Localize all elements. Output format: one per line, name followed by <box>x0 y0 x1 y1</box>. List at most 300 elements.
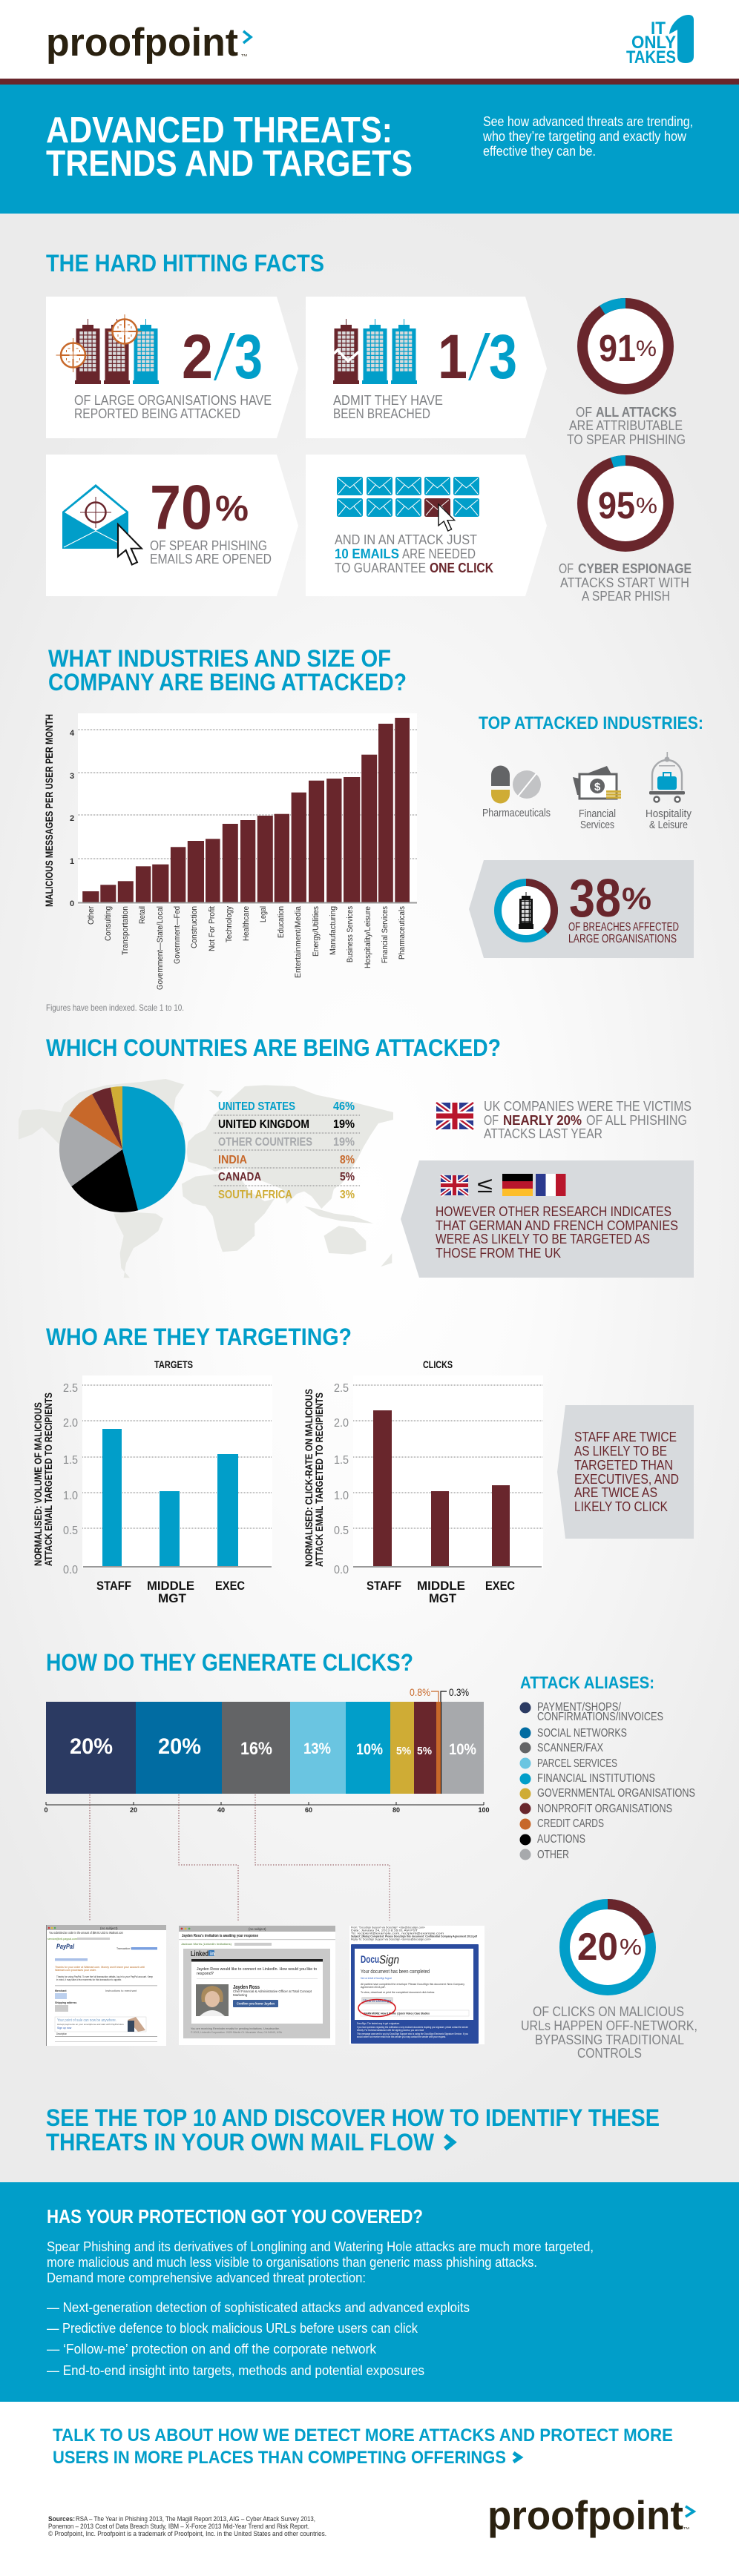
list: — Predictive defence to block malicious URLs before users can click <box>47 2321 418 2336</box>
axis title <box>33 1393 54 1566</box>
icon: chevron <box>445 2136 453 2149</box>
axis values: 0.5 <box>63 1525 78 1537</box>
category labels: Transportation <box>121 906 130 955</box>
screenshot: DocuSign email: Docu <box>361 1953 379 1965</box>
text: 95% caption: CYBER ESPIONAGE <box>578 561 692 576</box>
icon: email grid <box>337 477 479 531</box>
screenshot: PayPal email: Shipping address <box>55 2001 76 2004</box>
bar chart: malicious messages per industry <box>44 713 418 990</box>
logo: proofpoint footer: proofpoint <box>487 2492 683 2538</box>
callout: staff twice as likely: AS LIKELY TO BE <box>574 1444 667 1459</box>
screenshot: DocuSign email: View in DocuSign <box>364 1999 391 2004</box>
text: 95% caption: A SPEAR PHISH <box>582 589 670 604</box>
y axis values: 3 <box>70 772 74 781</box>
category labels: Healthcare <box>242 906 251 941</box>
heading: industries: COMPANY ARE BEING ATTACKED? <box>48 669 407 696</box>
category labels: Pharmaceuticals <box>398 906 407 960</box>
category labels: Legal <box>259 906 268 922</box>
title <box>46 110 413 184</box>
category labels: Government—State/Local <box>156 906 165 990</box>
category labels: Energy/Utilities <box>312 906 321 957</box>
legend: attack aliases: SOCIAL NETWORKS <box>537 1727 627 1740</box>
screenshot: DocuSign email: DocuSign. The fastest way to get a signature. <box>357 2022 400 2025</box>
legend: attack aliases: FINANCIAL INSTITUTIONS <box>537 1772 655 1785</box>
callout: staff twice as likely: LIKELY TO CLICK <box>574 1499 668 1514</box>
donut: 20%: 20 <box>577 1926 618 1969</box>
text: BEEN BREACHED <box>333 406 430 421</box>
panel: one third breached <box>306 297 547 438</box>
screenshot: DocuSign email: Your document has been completed <box>361 1969 430 1975</box>
axis values: 1.5 <box>63 1454 78 1467</box>
category labels <box>367 1579 515 1605</box>
footnote: index: Figures have been indexed. Scale 1 to 10. <box>46 1003 184 1013</box>
icon: financial services: Financial <box>579 808 616 820</box>
callout: German and French companies <box>401 1160 694 1278</box>
panel: 10 emails <box>306 455 547 596</box>
call to action: talk to us <box>53 2425 673 2468</box>
axis: 0 <box>44 1806 48 1814</box>
screenshot: PayPal email: Transaction ID: <box>116 1947 134 1950</box>
text: 20% caption: BYPASSING TRADITIONAL <box>535 2032 684 2047</box>
legend: country percentages: 8% <box>340 1154 355 1166</box>
screenshot: DocuSign email: This message was sent to you by DocuSign Support who is using the DocuSign Electronic Signature Service. If you <box>357 2032 468 2035</box>
y axis values: 0 <box>70 899 74 908</box>
screenshot: PayPal email: Instructions to merchant <box>105 1989 137 1992</box>
stat: 1/3: 1 <box>438 322 467 392</box>
screenshot: DocuSign email: Agreement 2013.pdf'. <box>361 1986 386 1989</box>
text <box>436 1204 678 1261</box>
callout: staff twice as likely: TARGETED THAN <box>574 1458 673 1473</box>
legend: attack aliases: SCANNER/FAX <box>537 1742 604 1754</box>
axis values: 2.0 <box>334 1417 349 1430</box>
callout: 38% of breaches <box>469 860 694 958</box>
stacked bar: click lures <box>44 1686 490 1814</box>
icon: UK flag <box>436 1103 473 1129</box>
intro text: who they’re targeting and exactly how <box>482 128 687 144</box>
axis title <box>303 1389 325 1567</box>
text: THAT GERMAN AND FRENCH COMPANIES <box>436 1218 678 1233</box>
stat: 70%: 70 <box>150 472 212 542</box>
donut: 95% <box>571 449 680 558</box>
category labels: Construction <box>190 906 199 948</box>
axis title: NORMALISED: VOLUME OF MALICIOUS <box>33 1402 44 1566</box>
stat: 2/3: 3 <box>234 322 263 392</box>
callout: red circle <box>358 1999 395 2017</box>
category labels <box>96 1579 245 1605</box>
bar chart: clicks: CLICKS <box>423 1358 453 1370</box>
small segment callouts: 0.3% <box>449 1686 469 1698</box>
screenshot: DocuSign email: directly. For technical assistance with the signing process, you can email <box>357 2029 424 2032</box>
call to action: top 10: SEE THE TOP 10 AND DISCOVER HOW TO IDENTIFY THESE <box>46 2104 660 2131</box>
panel: two thirds attacked <box>46 297 298 438</box>
screenshot: PayPal email: Walmart.com processes your order. <box>55 1969 96 1972</box>
text: OF LARGE ORGANISATIONS HAVE <box>74 393 272 408</box>
screenshot: PayPal email: PayPal <box>56 1943 74 1950</box>
axis: 40 <box>217 1806 225 1814</box>
text: WERE AS LIKELY TO BE TARGETED AS <box>436 1232 650 1246</box>
segment values: 10% <box>356 1741 383 1758</box>
icon: UK flag small <box>441 1175 468 1195</box>
text: AND IN AN ATTACK JUST <box>335 532 477 547</box>
donut: 95%: % <box>636 494 657 518</box>
axis title: ATTACK EMAIL TARGETED TO RECIPIENTS <box>43 1393 54 1566</box>
screenshot: PayPal email: Description <box>56 2032 67 2035</box>
legend: country percentages: OTHER COUNTRIES <box>218 1136 312 1149</box>
bar chart: targets: TARGETS <box>154 1358 193 1370</box>
y axis values: 4 <box>70 729 75 738</box>
legend: attack aliases: CONFIRMATIONS/INVOICES <box>537 1711 663 1723</box>
text: 91% caption: ARE ATTRIBUTABLE <box>569 418 683 433</box>
axis values: 0.0 <box>63 1564 78 1576</box>
screenshot: DocuSign email: would rather not receive email from this sender you may contact the sender with your request. <box>357 2035 446 2038</box>
screenshot: PayPal email: Merchant <box>55 1989 67 1992</box>
text: UK companies: UK COMPANIES WERE THE VICTIMS <box>484 1099 692 1114</box>
icon: hospitality and leisure <box>646 752 692 831</box>
category labels: Manufacturing <box>329 906 338 955</box>
title: TRENDS AND TARGETS <box>46 144 413 184</box>
stat: 38%: % <box>622 881 651 916</box>
axis: 20 <box>130 1806 137 1814</box>
text: ADMIT THEY HAVE <box>333 393 443 408</box>
small segment callouts: 0.8% <box>410 1686 430 1698</box>
world map background <box>19 1079 393 1278</box>
call to action: talk to us: TALK TO US ABOUT HOW WE DETECT MORE ATTACKS AND PROTECT MORE <box>53 2425 673 2445</box>
bars <box>82 718 410 902</box>
donut: 20% <box>565 1904 651 1990</box>
screenshot: LinkedIn email: Jackson Morris (LinkedIn Invitations) <box>181 1942 232 1946</box>
text: EMAILS ARE OPENED <box>150 552 272 567</box>
axis values: 2.5 <box>334 1382 349 1395</box>
legend: attack aliases: CREDIT CARDS <box>537 1817 604 1830</box>
heading: how do they generate clicks: HOW DO THEY GENERATE CLICKS? <box>46 1649 413 1676</box>
icon: hospitality and leisure: & Leisure <box>649 819 688 831</box>
banner <box>0 85 739 214</box>
list: — ‘Follow-me’ protection on and off the corporate network <box>47 2342 377 2357</box>
pie chart: countries <box>59 1086 185 1212</box>
category labels: Retail <box>138 906 147 924</box>
logo: it only takes 1 <box>626 15 694 67</box>
screenshot: PayPal email: Accept payments on your smartphone and start with PayPal Here <box>57 2023 124 2026</box>
heading: industries: WHAT INDUSTRIES AND SIZE OF <box>48 645 391 672</box>
text: 95% caption <box>559 561 692 604</box>
donut: 91%: 91 <box>599 327 636 369</box>
screenshot: LinkedIn email: Jayden Ross's invitation is awaiting your response <box>182 1934 258 1938</box>
category labels: Business Services <box>346 906 355 962</box>
heading: top attacked industries: TOP ATTACKED INDUSTRIES: <box>479 713 703 733</box>
donut: 91%: % <box>636 337 657 361</box>
text: THOSE FROM THE UK <box>436 1246 561 1261</box>
donut: 20%: % <box>620 1934 642 1960</box>
text: 91% caption <box>567 405 686 447</box>
screenshot: LinkedIn email: Marketing <box>233 1993 248 1997</box>
intro text: effective they can be. <box>483 143 596 159</box>
axis: 80 <box>393 1806 400 1814</box>
category labels: Government—Fed <box>173 906 182 964</box>
stat: 70%: % <box>215 489 249 529</box>
title: ADVANCED THREATS: <box>46 110 393 151</box>
segment values: 20% <box>158 1734 201 1759</box>
donut: 38% <box>498 882 554 939</box>
legend: attack aliases: GOVERNMENTAL ORGANISATIONS <box>537 1787 695 1800</box>
segment values: 5% <box>396 1745 411 1757</box>
axis: 100 <box>478 1806 490 1814</box>
heading: industries <box>48 645 407 696</box>
axis title: ATTACK EMAIL TARGETED TO RECIPIENTS <box>314 1393 325 1567</box>
screenshot: PayPal email: Your point of sale can now be anywhere. <box>57 2018 116 2023</box>
icon: French flag <box>536 1174 565 1196</box>
screenshot: PayPal email: Thanks for your order at Walmart.com. Money won't leave your account until <box>55 1966 145 1969</box>
screenshot: DocuSign email: Sign <box>379 1954 399 1966</box>
text <box>568 921 679 945</box>
screenshot: DocuSign email: If you have questions regarding this notification or any enclosed documents requiring your signature, please contact the sender <box>357 2026 469 2029</box>
segment values: 20% <box>70 1734 113 1759</box>
call to action: talk to us: USERS IN MORE PLACES THAN COMPETING OFFERINGS <box>53 2448 506 2468</box>
screenshot: LinkedIn email: Confirm you know Jayden <box>237 2002 275 2005</box>
segment values: 5% <box>417 1745 432 1757</box>
legend: country percentages: 5% <box>340 1171 355 1183</box>
donut: 91% <box>566 287 685 406</box>
heading: who are they targeting: WHO ARE THEY TARGETING? <box>46 1324 352 1350</box>
icon: targeted buildings <box>56 314 159 384</box>
legend: attack aliases: AUCTIONS <box>537 1833 585 1846</box>
icon: financial services <box>573 766 621 831</box>
text: 91% caption: TO SPEAR PHISHING <box>567 432 686 447</box>
category labels: Consulting <box>104 906 113 941</box>
less than or equal sign: ≤ <box>477 1173 493 1198</box>
screenshot: DocuSign email: To: recipient@example.com, recipient@example.com <box>351 1932 444 1935</box>
text: 91% caption: OF <box>576 405 592 420</box>
axis values: 1.0 <box>63 1490 78 1502</box>
legend: attack aliases: NONPROFIT ORGANISATIONS <box>537 1803 672 1815</box>
segment values: 10% <box>449 1741 476 1758</box>
axis <box>44 1802 490 1814</box>
heading: hard hitting facts: THE HARD HITTING FACTS <box>46 250 324 277</box>
text: 95% caption: OF <box>559 561 574 576</box>
callout: staff twice as likely: ARE TWICE AS <box>574 1485 657 1500</box>
category labels: MIDDLE <box>417 1579 465 1593</box>
intro text <box>482 113 693 159</box>
callout: staff twice as likely <box>557 1405 694 1539</box>
screenshot: LinkedIn email: You are receiving Reminder emails for pending invitations. Unsubscribe. <box>191 2027 280 2030</box>
text <box>74 393 272 421</box>
icon: German flag <box>502 1174 533 1196</box>
footer background <box>0 2402 739 2576</box>
screenshot: LinkedIn email: Linked <box>191 1950 208 1958</box>
segment values: 13% <box>303 1740 331 1757</box>
sources: RSA – The Year in Phishing 2013, The Magill Report 2013, AIG – Cyber Attack Survey 2013, <box>76 2515 315 2523</box>
screenshot: LinkedIn email <box>179 1926 335 2045</box>
logo: it only takes 1: IT <box>651 19 666 39</box>
y axis values: 2 <box>70 814 74 823</box>
category labels: EXEC <box>485 1579 515 1593</box>
text: 20% caption: CONTROLS <box>577 2046 642 2061</box>
text: OF BREACHES AFFECTED <box>568 921 679 934</box>
small segment callouts <box>410 1686 469 1702</box>
category labels: MGT <box>158 1591 187 1605</box>
axis values <box>334 1382 349 1576</box>
paragraph: Demand more comprehensive advanced threat protection: <box>47 2270 366 2285</box>
category labels <box>87 905 407 990</box>
legend: attack aliases: PAYMENT/SHOPS/ <box>537 1701 622 1714</box>
category labels: EXEC <box>215 1579 245 1593</box>
text: ONE CLICK <box>430 561 493 575</box>
legend: attack aliases: ATTACK ALIASES: <box>520 1673 654 1692</box>
text: 91% caption: ALL ATTACKS <box>596 405 677 420</box>
panel: has your protection got you covered: HAS YOUR PROTECTION GOT YOU COVERED? <box>47 2205 423 2227</box>
icon: pharmaceuticals <box>482 765 551 819</box>
text: 95% caption: ATTACKS START WITH <box>560 575 689 590</box>
icon: envelope with target <box>62 484 142 565</box>
axis values: 1.0 <box>334 1490 349 1502</box>
y axis title: MALICIOUS MESSAGES PER USER PER MONTH <box>44 714 55 907</box>
legend: attack aliases <box>519 1673 695 1861</box>
screenshot: LinkedIn email: Jayden Ross <box>233 1985 260 1990</box>
call to action: top 10: THREATS IN YOUR OWN MAIL FLOW <box>46 2129 435 2156</box>
text: 20% caption: URLs HAPPEN OFF-NETWORK, <box>521 2018 697 2033</box>
page background <box>0 214 739 2182</box>
connector lines to examples <box>90 1794 390 1921</box>
category labels: MIDDLE <box>147 1579 194 1593</box>
category labels: Not For Profit <box>208 906 217 951</box>
category labels: Hospitality/Leisure <box>364 906 372 968</box>
stat: 2/3: 2 <box>182 322 213 392</box>
text: OF SPEAR PHISHING <box>150 538 267 553</box>
category labels: STAFF <box>367 1579 401 1593</box>
text: UK companies: NEARLY 20% <box>503 1113 582 1128</box>
screenshot: DocuSign email <box>349 1926 485 2044</box>
axis values: 0.0 <box>334 1564 349 1576</box>
text: UK companies <box>484 1099 692 1141</box>
panel: has your protection got you covered <box>0 2182 739 2402</box>
legend: attack aliases: OTHER <box>537 1849 569 1861</box>
y axis values <box>70 729 75 908</box>
heading: countries: WHICH COUNTRIES ARE BEING ATTACKED? <box>46 1034 501 1061</box>
legend: country percentages: SOUTH AFRICA <box>218 1189 292 1201</box>
screenshot: DocuSign email: Reply-To: DocuSign Support via DocuSign <service@docusign.com> <box>351 1938 431 1941</box>
screenshot: LinkedIn email: © 2013, LinkedIn Corporation. 2029 Stierlin Ct. Mountain View, CA 94043, USA <box>191 2031 283 2034</box>
text <box>333 393 443 421</box>
logo: it only takes 1: TAKES <box>626 47 676 67</box>
screenshot: LinkedIn email: respond? <box>197 1972 214 1976</box>
logo: proofpoint: TM <box>241 53 247 57</box>
icon: financial services: $ <box>594 781 601 793</box>
text <box>335 532 493 575</box>
stat: 1/3 <box>438 322 517 392</box>
screenshot: DocuSign email: Sent on behalf of DocuSign Support <box>361 1977 392 1980</box>
screenshot: PayPal email: (no subject) <box>100 1926 118 1930</box>
screenshot: PayPal email: service@intl.paypal.com <box>47 1938 77 1941</box>
segment values <box>70 1734 476 1759</box>
legend: country percentages: 19% <box>333 1118 355 1131</box>
stat: 2/3 <box>182 322 263 392</box>
logo: proofpoint footer: TM <box>683 2526 689 2530</box>
screenshot: LinkedIn email: (no subject) <box>249 1927 266 1931</box>
screenshot: DocuSign email: Date: January 24, 2013 8:16:01 AM PST <box>351 1929 418 1932</box>
text: LARGE ORGANISATIONS <box>568 933 677 945</box>
screenshot: PayPal email: Sign up now <box>57 2027 72 2030</box>
icon: pharmaceuticals: Pharmaceuticals <box>482 808 551 819</box>
legend: country percentages: UNITED STATES <box>218 1100 295 1113</box>
logo: proofpoint: proofpoint <box>46 21 238 65</box>
text: REPORTED BEING ATTACKED <box>74 406 240 421</box>
text: HOWEVER OTHER RESEARCH INDICATES <box>436 1204 671 1219</box>
category labels: Technology <box>225 906 234 942</box>
logo: it only takes 1: ONLY <box>631 33 676 53</box>
intro text: See how advanced threats are trending, <box>483 113 693 129</box>
bar chart: clicks <box>303 1358 543 1605</box>
screenshot: LinkedIn email: Chief Financial & Administrative Officer at Total Concept <box>233 1989 312 1993</box>
call to action: top 10 <box>46 2104 660 2156</box>
legend: country percentages: INDIA <box>218 1154 247 1166</box>
legend: country percentages: 3% <box>340 1189 355 1201</box>
category labels: Financial Services <box>381 906 390 963</box>
sources: Sources: <box>48 2515 75 2523</box>
text: TO GUARANTEE <box>335 561 426 575</box>
bar chart: targets <box>33 1358 272 1605</box>
panel: 70% opened <box>46 455 298 596</box>
screenshot: DocuSign email: LEARN MORE: How It Works | Quick Video | Case Studies <box>363 2012 430 2015</box>
legend: country percentages <box>214 1100 361 1201</box>
maroon stripe <box>0 79 739 85</box>
screenshot: DocuSign email: Subject: [Ruby] Completed: Please DocuSign this document: Confidential Company Agreement 2013.pdf <box>351 1935 478 1938</box>
icon: breached buildings <box>333 319 417 384</box>
screenshot: PayPal email: You submitted an order in the amount of $99.91 USD to Walmart.com <box>49 1931 123 1935</box>
screenshot: DocuSign email: To view, download or print the completed document click below. <box>361 1991 435 1994</box>
icon: chevron <box>513 2453 520 2462</box>
paragraph: Spear Phishing and its derivatives of Longlining and Watering Hole attacks are much more targeted, <box>47 2239 594 2254</box>
stat: 38%: 38 <box>569 869 621 928</box>
axis values: 2.5 <box>63 1382 78 1395</box>
text: UK companies: OF <box>484 1113 499 1128</box>
segment values: 16% <box>240 1739 272 1759</box>
paragraph <box>47 2239 594 2285</box>
category labels: Other <box>87 906 96 925</box>
screenshot: DocuSign email: From: "DocuSign Support via DocuSign" <dse@docusign.com> <box>351 1926 425 1929</box>
axis title: NORMALISED: CLICK-RATE ON MALICIOUS <box>303 1389 315 1567</box>
text: UK companies: OF ALL PHISHING <box>586 1113 687 1128</box>
screenshot: DocuSign email: All parties have completed the envelope 'Please DocuSign this document: New Company <box>361 1983 464 1986</box>
sources: © Proofpoint, Inc. Proofpoint is a trademark of Proofpoint, Inc. in the United States and other countries. <box>48 2530 326 2538</box>
screenshot: PayPal email: in mind, it may take a few moments for this transaction to appear. <box>56 1978 122 1981</box>
header bar <box>0 0 739 79</box>
list: — Next-generation detection of sophisticated attacks and advanced exploits <box>47 2300 470 2315</box>
text: 10 EMAILS <box>335 546 399 561</box>
text: UK companies: ATTACKS LAST YEAR <box>484 1126 602 1141</box>
axis values: 2.0 <box>63 1417 78 1430</box>
sources: Ponemon – 2013 Cost of Data Breach Study, IBM – X-Force 2013 Mid-Year Trend and Risk Report. <box>48 2523 309 2531</box>
donut: 95%: 95 <box>598 484 635 526</box>
callout: staff twice as likely: STAFF ARE TWICE <box>574 1430 677 1444</box>
axis values: 0.5 <box>334 1525 349 1537</box>
icon: black building <box>519 892 533 929</box>
callout: staff twice as likely: EXECUTIVES, AND <box>574 1472 679 1487</box>
text: ARE NEEDED <box>402 546 476 561</box>
legend: country percentages: 19% <box>333 1136 355 1149</box>
category labels: MGT <box>429 1591 457 1605</box>
icon: hospitality and leisure: Hospitality <box>646 808 692 820</box>
category labels: Education <box>277 906 286 938</box>
y axis values: 1 <box>70 857 74 866</box>
icon: financial services: Services <box>580 819 614 831</box>
screenshot: LinkedIn email: Jayden Ross would like to connect on LinkedIn. How would you like to <box>197 1967 317 1972</box>
list: — End-to-end insight into targets, methods and potential exposures <box>47 2363 424 2378</box>
screenshot: LinkedIn email: in <box>210 1952 214 1957</box>
screenshot: PayPal email: Thanks for using PayPal. To see the full transaction details, log in to your PayPal account. Keep <box>56 1975 153 1978</box>
category labels: STAFF <box>96 1579 131 1593</box>
text: 20% caption <box>521 2004 697 2061</box>
axis values <box>63 1382 78 1576</box>
legend: country percentages: 46% <box>333 1100 355 1113</box>
